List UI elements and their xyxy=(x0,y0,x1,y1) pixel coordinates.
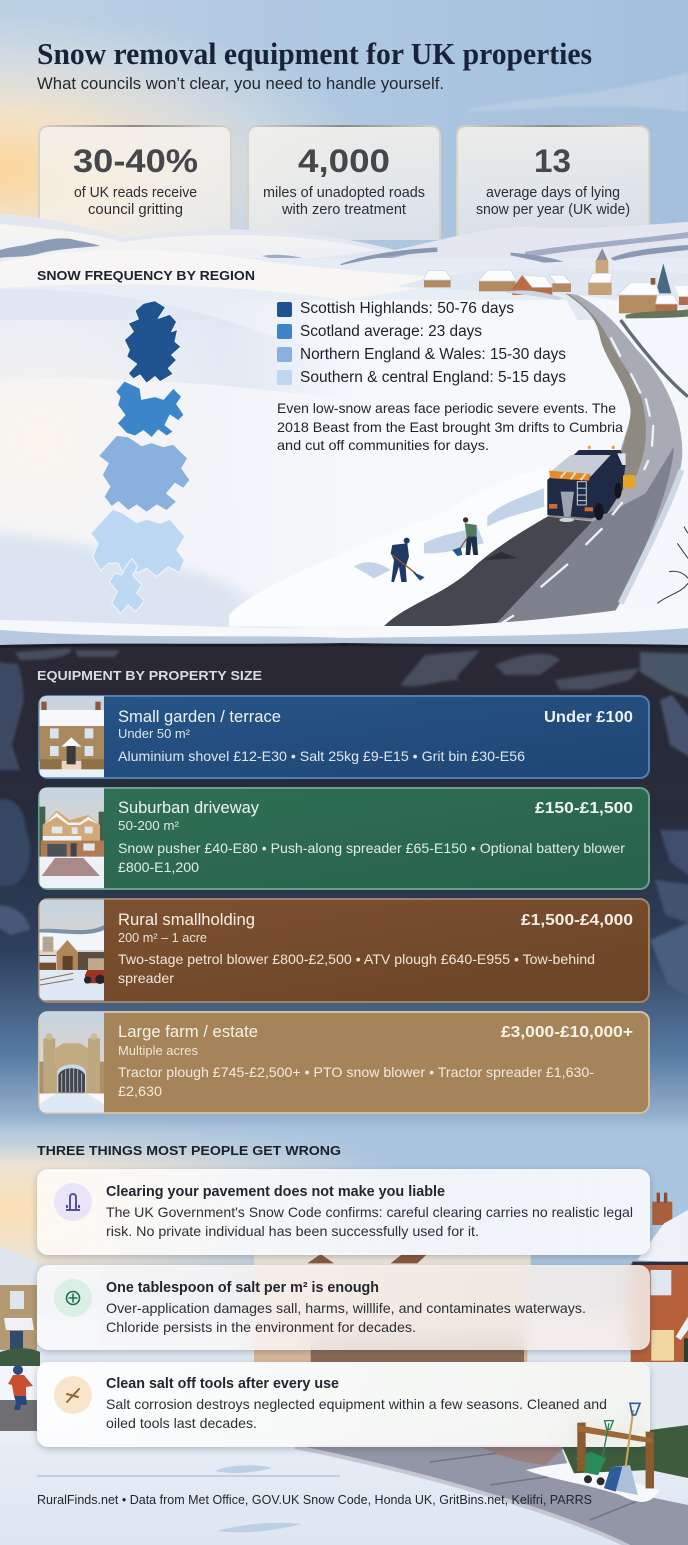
snow field xyxy=(0,250,688,660)
icon: twig tool xyxy=(54,1376,92,1414)
icon: lighthouse marker xyxy=(54,1183,92,1221)
severe events note: Even low-snow areas face periodic severe events. The xyxy=(277,400,616,416)
myth text: Clean salt off tools after every use xyxy=(106,1376,339,1392)
left house xyxy=(0,1247,40,1445)
myth text xyxy=(106,1376,607,1431)
thumbnail: farmyard with tractor xyxy=(39,899,105,1001)
footer source line: RuralFinds.net • Data from Met Office, GOV.UK Snow Code, Honda UK, GritBins.net, Kelifri, PARRS xyxy=(37,1492,592,1507)
card: suburban driveway: Suburban driveway xyxy=(118,798,259,817)
myth text xyxy=(106,1280,586,1335)
severe events note xyxy=(277,400,623,453)
workers shovelling xyxy=(391,517,478,582)
ground and pavement xyxy=(0,1247,688,1545)
three things heading: THREE THINGS MOST PEOPLE GET WRONG xyxy=(37,1143,341,1158)
garden tools and fence xyxy=(562,1403,654,1495)
legend item: Scottish Highlands: Scottish Highlands: 50-76 days xyxy=(300,300,514,317)
myth text: Salt corrosion destroys neglected equipment within a few seasons. Cleaned and xyxy=(106,1396,607,1412)
UK snow frequency map xyxy=(91,301,190,613)
myth text xyxy=(106,1184,633,1239)
severe events note: and cut off communities for days. xyxy=(277,437,489,453)
icon: circle plus xyxy=(54,1279,92,1317)
stat card: days of lying snow: snow per year (UK wide) xyxy=(476,202,630,218)
card: large farm: £3,000-£10,000+ xyxy=(501,1024,633,1041)
stat card: days of lying snow: 13 xyxy=(534,143,571,179)
region: Scottish Highlands xyxy=(124,301,181,383)
middle houses behind cards xyxy=(254,1263,527,1363)
severe events note: 2018 Beast from the East brought 3m drifts to Cumbria xyxy=(277,419,623,435)
roadside bush xyxy=(657,527,688,603)
myth card: clean tools xyxy=(37,1362,650,1447)
card: rural smallholding: £1,500-£4,000 xyxy=(521,912,633,929)
card: suburban driveway: Snow pusher £40-E80 • Push-along spreader £65-E150 • Optional battery blower xyxy=(118,840,625,856)
myth card: salt quantity xyxy=(37,1265,650,1350)
legend item: Northern England and Wales: Northern England & Wales: 15-30 days xyxy=(300,346,566,363)
child playing in snow xyxy=(8,1365,33,1410)
card: rural smallholding: spreader xyxy=(118,970,174,986)
card: large farm: Large farm / estate xyxy=(118,1022,258,1041)
card: small garden: Aluminium shovel £12-E30 • Salt 25kg £9-E15 • Grit bin £30-E56 xyxy=(118,748,525,764)
myth text: Clearing your pavement does not make you liable xyxy=(106,1184,445,1200)
myth text: One tablespoon of salt per m² is enough xyxy=(106,1280,379,1296)
card: small garden: Under £100 xyxy=(544,709,633,726)
card: rural smallholding: Two-stage petrol blower £800-£2,500 • ATV plough £640-E955 • Tow-behind xyxy=(118,951,595,967)
snow bank above wall xyxy=(0,600,688,648)
legend item: Southern and central England: Southern & central England: 5-15 days xyxy=(300,369,566,386)
myth text: Chloride persists in the environment for decades. xyxy=(106,1319,416,1335)
cleared snow shoulder xyxy=(229,467,547,627)
road xyxy=(384,293,688,626)
thumbnail: detached house with driveway xyxy=(39,788,104,888)
myth text: risk. No private individual has been successfully used for it. xyxy=(106,1223,479,1239)
gritter truck xyxy=(547,446,635,522)
snowy hills xyxy=(0,214,688,320)
card: large farm: Multiple acres xyxy=(118,1044,198,1058)
region: Scotland average xyxy=(116,381,184,438)
region: Southern and central England xyxy=(91,509,185,613)
region: Northern England and Wales xyxy=(99,435,190,512)
footer rule xyxy=(37,1475,340,1477)
myth card: pavement liability xyxy=(37,1169,650,1255)
myth text: oiled tools last decades. xyxy=(106,1415,257,1431)
subtitle: What councils won’t clear, you need to handle yourself. xyxy=(37,74,444,93)
stat card: gritting: of UK reads receive xyxy=(74,185,197,201)
stat card: unadopted roads: 4,000 xyxy=(298,143,390,179)
snow frequency heading: SNOW FREQUENCY BY REGION xyxy=(37,268,255,283)
card: rural smallholding xyxy=(39,899,649,1002)
stat card: gritting: council gritting xyxy=(88,202,183,218)
stat card: unadopted roads xyxy=(248,126,440,240)
card: suburban driveway xyxy=(39,788,649,889)
sky with warm sunrise glow xyxy=(0,0,688,300)
stat card: days of lying snow xyxy=(457,126,649,240)
village xyxy=(341,245,688,318)
stat card: unadopted roads: with zero treatment xyxy=(281,202,406,218)
thumbnail: estate gates xyxy=(39,1012,104,1113)
title: Snow removal equipment for UK properties xyxy=(37,36,592,71)
card: small garden xyxy=(39,696,649,778)
myth text: Over-application damages sall, harms, willlife, and contaminates waterways. xyxy=(106,1300,586,1316)
card: small garden: Small garden / terrace xyxy=(118,707,281,726)
card: large farm: Tractor plough £745-£2,500+ • PTO snow blower • Tractor spreader £1,630- xyxy=(118,1064,594,1080)
card: rural smallholding: Rural smallholding xyxy=(118,910,255,929)
card: suburban driveway: £150-£1,500 xyxy=(535,800,633,817)
winding road and snow scene xyxy=(229,245,688,627)
stone wall section background xyxy=(0,640,688,1140)
card: large farm xyxy=(39,1012,649,1113)
card: small garden: Under 50 m² xyxy=(118,727,190,741)
legend item: Scotland average: Scotland average: 23 days xyxy=(300,323,482,340)
right brick house xyxy=(631,1193,688,1393)
myth text: The UK Government's Snow Code confirms: careful clearing carries no realistic legal xyxy=(106,1204,633,1220)
card: rural smallholding: 200 m² – 1 acre xyxy=(118,931,207,945)
card: large farm: £2,630 xyxy=(118,1083,162,1099)
stat card: days of lying snow: average days of lying xyxy=(486,185,620,201)
neighbourhood street scene xyxy=(254,1193,688,1393)
thumbnail: terraced house xyxy=(39,696,104,777)
card: suburban driveway: 50-200 m² xyxy=(118,819,179,833)
stat card: gritting: 30-40% xyxy=(73,143,198,179)
stat card: gritting xyxy=(39,126,231,240)
equipment heading: EQUIPMENT BY PROPERTY SIZE xyxy=(37,668,262,683)
snow behind the village xyxy=(397,267,688,320)
legend xyxy=(277,300,566,386)
lower sky xyxy=(0,1123,688,1274)
stat card: unadopted roads: miles of unadopted roads xyxy=(263,185,425,201)
card: suburban driveway: £800-E1,200 xyxy=(118,859,199,875)
